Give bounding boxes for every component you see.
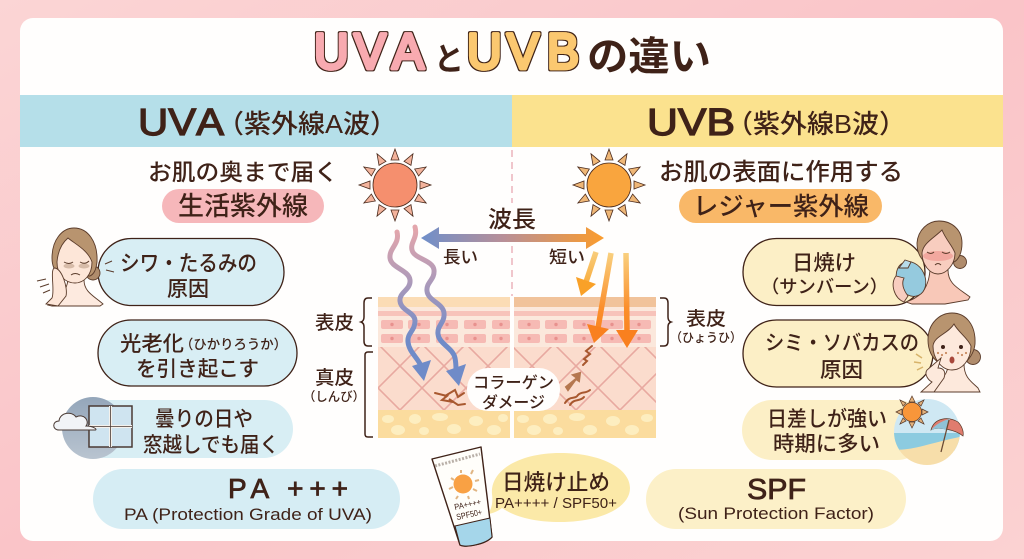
brace: epidermis right [660, 298, 671, 346]
title: UVB [467, 25, 579, 80]
label: short: 短い [549, 248, 585, 267]
bubble: strong sunlight season: 時期に多い [773, 433, 880, 456]
UVB header band: UVB [647, 102, 735, 144]
UVA subtitle: お肌の奥まで届く [148, 159, 338, 185]
left label: dermis [303, 367, 365, 404]
bubble: reaches through clouds and windows: 窓越しでも届く [143, 434, 279, 457]
icon: UVB sun [573, 149, 645, 221]
sunscreen speech bubble: 日焼け止め [502, 470, 610, 495]
small brown arrow [566, 373, 580, 390]
bubble: wrinkles and sagging [98, 238, 284, 306]
left label: dermis: 真皮 [315, 367, 354, 389]
right label: epidermis: 表皮 [686, 308, 726, 330]
skin cross-section: left [378, 297, 510, 438]
bubble: sunburn: （サンバーン） [761, 277, 888, 297]
icon: sunscreen tube [432, 447, 492, 546]
icon: woman with wrinkles [37, 228, 114, 306]
UVA header band: （紫外線A波） [217, 109, 397, 139]
bubble: strong sunlight season [742, 400, 927, 460]
pill: PA +++: PA (Protection Grade of UVA) [124, 506, 372, 524]
bubble: spots and freckles: シミ・ソバカスの [765, 332, 919, 355]
pill: SPF: (Sun Protection Factor) [678, 505, 874, 523]
collagen damage label: ダメージ [482, 393, 545, 412]
icon: UVA sun [359, 149, 431, 221]
title: の違い [587, 35, 711, 79]
left label: epidermis: 表皮 [315, 312, 354, 334]
sunscreen speech bubble: PA++++ / SPF50+ [495, 496, 617, 512]
bubble: spots and freckles [743, 320, 933, 387]
bubble: wrinkles and sagging: シワ・たるみの [120, 251, 257, 276]
bubble: photoaging: （ひかりろうか） [180, 337, 287, 352]
UVB tag: レジャー紫外線: レジャー紫外線 [693, 193, 869, 221]
title: と [434, 41, 464, 77]
skin cross-section: right [514, 297, 656, 438]
bubble: reaches through clouds and windows: 曇りの日や [155, 408, 253, 431]
icon: cloud and window [54, 397, 132, 459]
icon: sunburned woman [891, 221, 970, 304]
bubble: spots and freckles: 原因 [820, 359, 863, 382]
pill: PA +++: PA +++ [228, 473, 348, 504]
icon: sunscreen tube: SPF50+ [455, 507, 483, 522]
UVB subtitle: お肌の表面に作用する [659, 159, 903, 186]
wavelength double arrow [421, 227, 604, 249]
right label: epidermis: （ひょうひ） [670, 331, 742, 345]
center dashed divider [511, 150, 513, 296]
collagen damage label: コラーゲン [473, 374, 554, 392]
collagen damage label [467, 368, 560, 412]
UVA header band [20, 95, 512, 147]
UVA header band: UVA [138, 102, 225, 144]
sunscreen speech bubble [488, 453, 630, 522]
UVA tag: 生活紫外線: 生活紫外線 [178, 191, 308, 221]
bubble: reaches through clouds and windows [63, 400, 293, 458]
pill: PA +++ [93, 469, 400, 529]
pill: SPF [646, 469, 906, 529]
bracket: dermis [365, 352, 373, 437]
bubble: photoaging [98, 320, 297, 386]
UVB orange arrows [576, 252, 638, 348]
collagen damage marks [435, 346, 592, 405]
pill: SPF: SPF [747, 474, 806, 506]
bubble: photoaging: を引き起こす [136, 358, 259, 381]
icon: sunscreen tube: PA++++ [453, 497, 482, 512]
bubble: photoaging: 光老化 [120, 333, 184, 356]
title: UVA [314, 25, 424, 80]
UVA wavy arrows [390, 227, 466, 386]
icon: beach scene [894, 395, 964, 465]
left label: dermis: （しんび） [303, 390, 365, 404]
UVB header band: （紫外線B波） [726, 109, 906, 139]
brace: epidermis left [361, 298, 372, 346]
bubble: sunburn: 日焼け [792, 252, 856, 275]
label: long: 長い [443, 248, 478, 267]
UVB header band [512, 95, 1003, 147]
wavelength label: 波長 [488, 206, 536, 232]
right label: epidermis [670, 308, 742, 345]
title [314, 25, 711, 80]
bubble: wrinkles and sagging: 原因 [167, 278, 209, 301]
icon: woman with freckles [914, 313, 980, 392]
bubble: strong sunlight season: 日差しが強い [767, 408, 887, 431]
bubble: sunburn [743, 238, 925, 306]
